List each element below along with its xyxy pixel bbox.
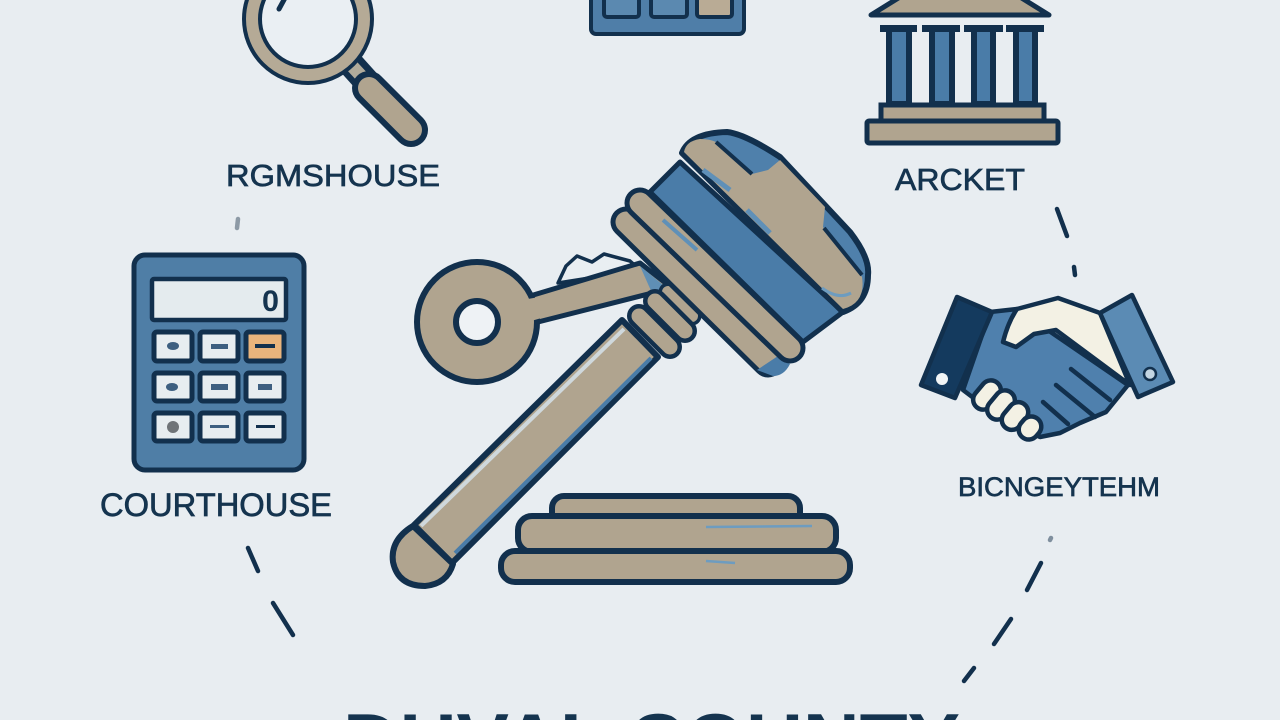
gavel sound block	[501, 496, 850, 582]
right cuff	[1100, 295, 1173, 397]
calculator keys	[154, 332, 284, 441]
dashed ring: lower right	[964, 538, 1051, 681]
gavel handle end cap	[393, 526, 453, 586]
gavel handle	[414, 320, 658, 563]
icon: classical building	[867, 0, 1058, 143]
fingers	[969, 376, 1045, 444]
left cuff	[921, 297, 992, 398]
dashed ring: upper left fragment	[237, 219, 238, 228]
icon: key	[417, 254, 672, 382]
icon: magnifying glass	[252, 0, 411, 130]
icon: gavel	[393, 132, 868, 586]
icon: handshake	[921, 295, 1173, 444]
gavel head	[626, 132, 868, 376]
light hand	[1003, 298, 1130, 385]
dashed ring: upper right	[1057, 209, 1075, 275]
calculator display	[152, 279, 286, 320]
label: ARCKET: ARCKET	[895, 162, 1025, 197]
label: RGMSHOUSE: RGMSHOUSE	[226, 158, 440, 193]
dashed ring: lower left	[248, 548, 293, 635]
label: BIGNGYTEM: BICNGEYTEHM	[958, 472, 1160, 502]
label: COURTHOUSE: COURTHOUSE	[100, 487, 332, 523]
blue hand	[963, 309, 1128, 437]
calculator display: 0	[262, 285, 279, 318]
icon: calculator	[134, 255, 304, 470]
icon: top keypad	[591, 0, 744, 34]
gavel collar	[639, 292, 692, 347]
